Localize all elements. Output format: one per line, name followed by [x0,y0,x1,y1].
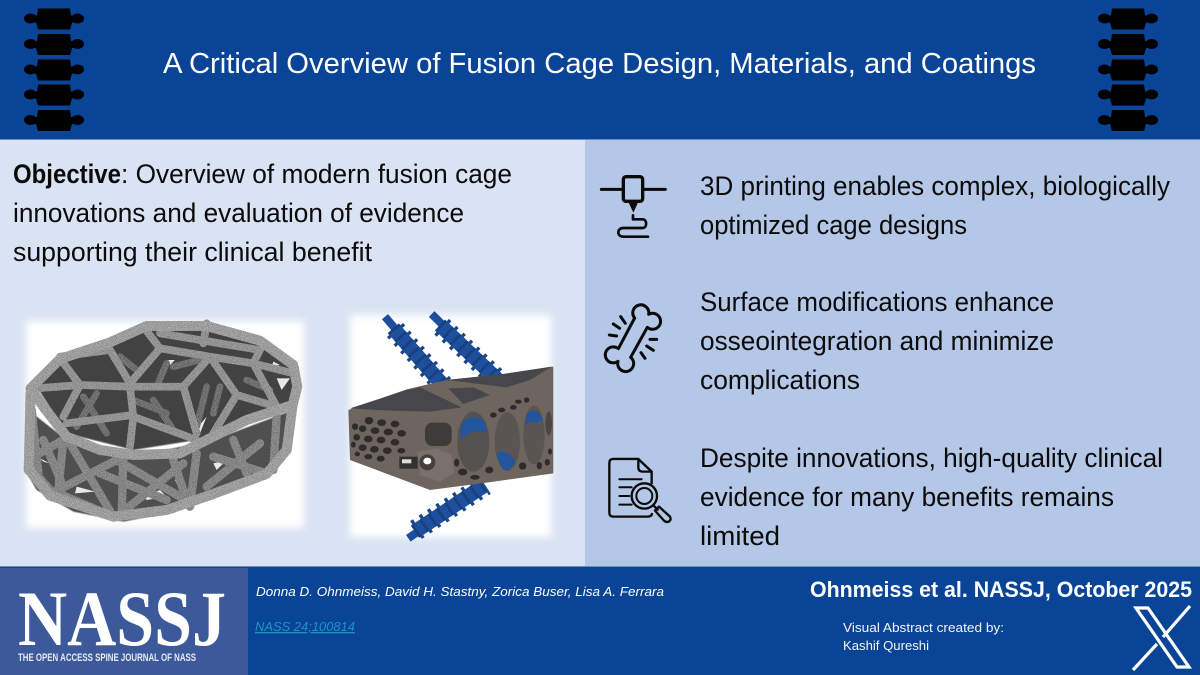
objective text: innovations and evaluation of evidence [13,198,464,228]
icon: bone [605,305,661,372]
finding: clinical evidence [700,443,1163,551]
fixation plate [417,448,454,482]
windows [457,412,489,472]
panel: key findings background [585,139,1200,567]
objective text: Objective [13,159,121,189]
credit: Visual Abstract created by: [843,620,1004,635]
panel: objective background [0,139,585,567]
authors: Donna D. Ohnmeiss, David H. Stastny, Zorica Buser, Lisa A. Ferrara [256,584,664,599]
finding: clinical evidence: limited [700,521,780,551]
finding: surface modifications: complications [700,365,860,395]
title: A Critical Overview of Fusion Cage Design, Materials, and Coatings [163,48,1036,80]
finding: 3D printing: 3D printing enables complex, biologically [700,171,1170,201]
logo: NASSJ: NASSJ [18,575,226,662]
header band [0,0,1200,140]
cage dark interior [37,323,297,450]
image: lattice fusion cage [25,321,304,528]
objective text: : Overview of modern fusion cage [121,159,512,189]
image: cage with blue screws [348,314,553,538]
credit [843,620,1004,653]
finding: surface modifications: osseointegration and minimize [700,326,1054,356]
icon: document with magnifier [609,459,671,522]
finding: surface modifications [700,287,1054,395]
finding: surface modifications: Surface modifications enhance [700,287,1054,317]
icon: spine left [24,8,84,131]
key findings text [700,171,1170,551]
finding: clinical evidence: Despite innovations, high-quality clinical [700,443,1163,473]
icon: spine right [1098,8,1158,131]
logo: NASSJ: THE OPEN ACCESS SPINE JOURNAL OF NASS [18,652,196,664]
icon: X logo [1133,606,1190,670]
objective text: supporting their clinical benefit [13,237,372,267]
finding: 3D printing: optimized cage designs [700,210,967,240]
footer band [0,566,1200,675]
screw shafts [385,314,505,538]
citation link: NASS 24;100814 [255,619,355,634]
finding: clinical evidence: evidence for many benefits remains [700,482,1114,512]
objective text [13,159,512,267]
finding: 3D printing [700,171,1170,240]
citation heading: Ohnmeiss et al. NASSJ, October 2025 [810,577,1192,602]
icon: 3D printer [601,177,665,237]
implant body [348,367,553,490]
lattice pores [351,397,552,480]
credit: Kashif Qureshi [843,638,929,653]
